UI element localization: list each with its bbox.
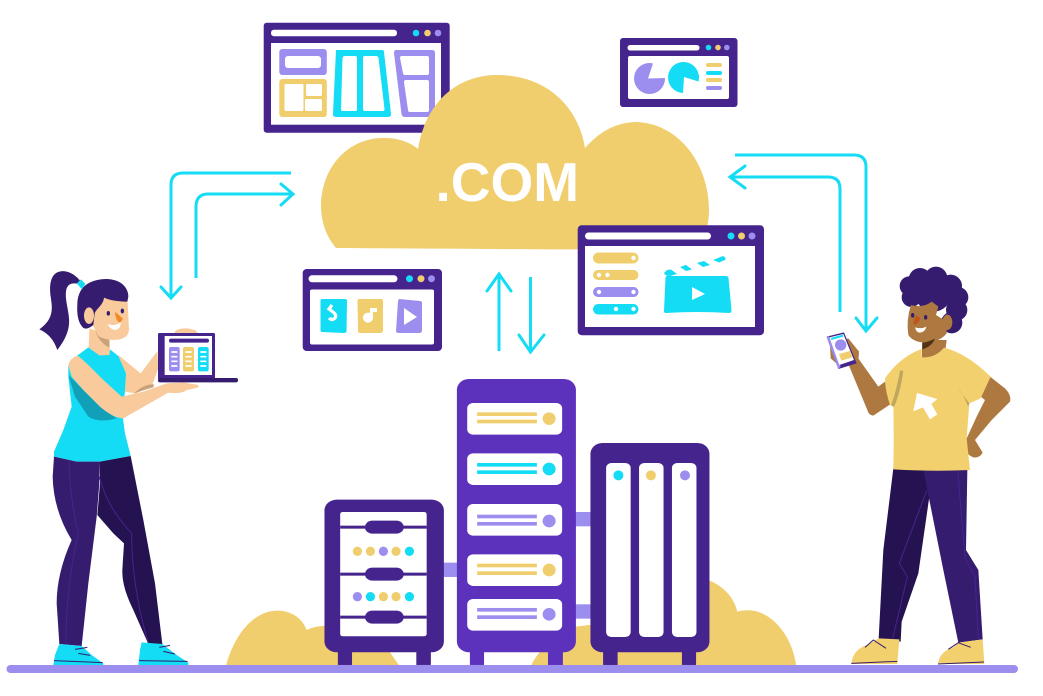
ponytail xyxy=(39,271,82,350)
shoes xyxy=(53,642,188,665)
t-shirt xyxy=(885,348,991,471)
background bushes xyxy=(226,577,796,667)
hand with phone xyxy=(827,332,859,369)
person: man with phone xyxy=(827,267,1010,664)
trousers xyxy=(879,468,983,643)
window: video player xyxy=(578,225,764,335)
server: right rack xyxy=(590,443,709,665)
cloud with domain label xyxy=(321,75,709,249)
shoes xyxy=(851,638,984,664)
chin shadow xyxy=(922,339,935,349)
shirt fold shadows xyxy=(893,371,969,407)
server racks xyxy=(324,379,709,665)
eyes nose and smile xyxy=(107,309,124,330)
ear xyxy=(84,307,94,324)
ground line xyxy=(6,665,1018,673)
person: woman with laptop xyxy=(39,271,238,665)
shirt cursor icon xyxy=(913,393,937,419)
near arm xyxy=(68,356,198,418)
face xyxy=(908,302,947,343)
cloud with domain label: .COM xyxy=(436,151,579,213)
arrows: cloud and woman xyxy=(161,173,293,298)
leggings xyxy=(53,456,162,646)
raised arm xyxy=(847,358,892,416)
window: media files xyxy=(303,269,442,351)
top xyxy=(54,347,131,462)
neck xyxy=(89,328,110,357)
hip arm xyxy=(965,377,1010,457)
window: pie charts xyxy=(620,38,738,107)
arrows: cloud and man xyxy=(730,155,877,331)
far arm xyxy=(118,351,159,393)
hand under laptop xyxy=(167,383,198,393)
ear xyxy=(942,315,952,330)
arrows: cloud and servers xyxy=(487,274,544,352)
curly hair xyxy=(900,267,968,333)
eyes nose and smile xyxy=(911,313,927,333)
hair tie xyxy=(77,279,85,289)
neck xyxy=(922,340,947,358)
window: dashboard layout xyxy=(264,23,450,133)
hair xyxy=(77,279,128,329)
server: left rack xyxy=(324,500,444,665)
connector links xyxy=(442,512,592,619)
face xyxy=(90,293,129,340)
laptop xyxy=(158,333,238,382)
server: tall centre rack xyxy=(457,379,576,665)
fingers xyxy=(174,328,198,335)
clapperboard icon xyxy=(664,256,732,313)
